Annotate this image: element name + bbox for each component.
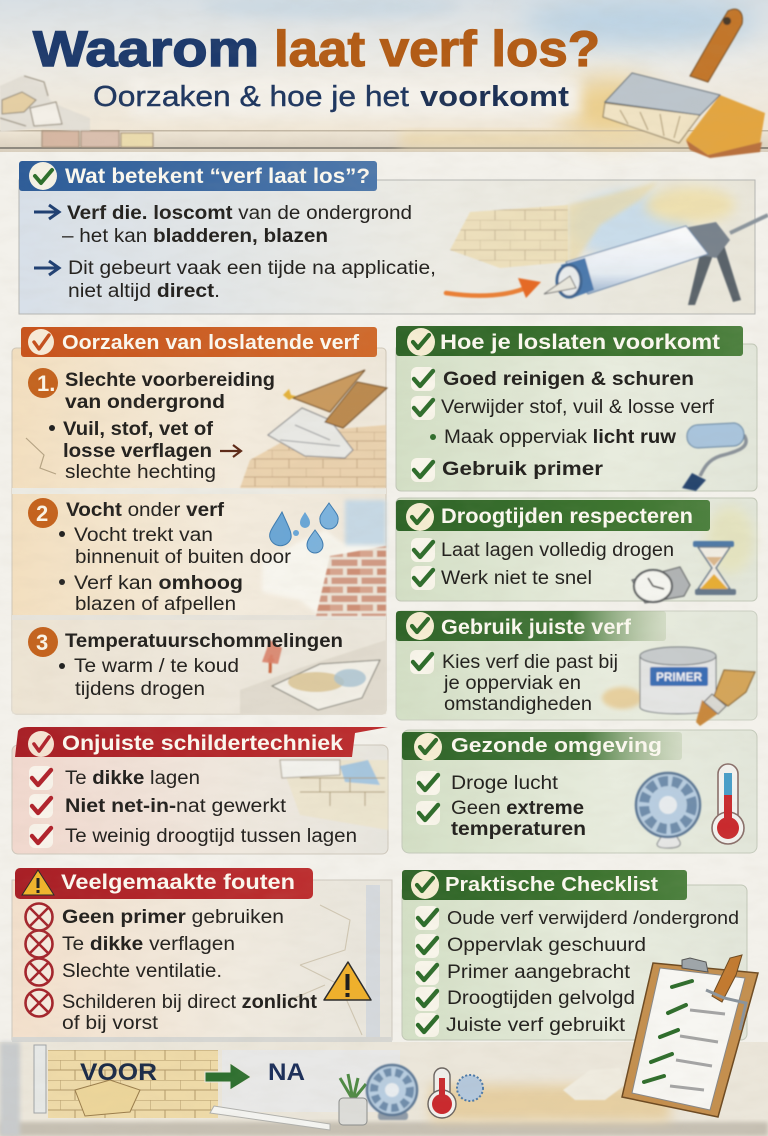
illustration: cracked wall: [280, 760, 388, 830]
text block: Verf die. loscomt van de ondergrond: [67, 203, 412, 224]
heading bar: Hoe je loslaten voorkomt: [440, 331, 720, 354]
icon: caulking gun with orange arrow: [446, 215, 768, 305]
icon: small fan: [367, 1065, 417, 1120]
title: Waarom: [33, 21, 259, 77]
heading bar: [19, 161, 377, 191]
item: [29, 766, 200, 790]
item: [416, 771, 559, 795]
badge 1: 1.: [37, 371, 55, 396]
cause 2 detail: Verf kan omhoog: [74, 573, 243, 594]
subtitle: Oorzaken & hoe je het: [93, 81, 409, 113]
before wall: [48, 1050, 218, 1118]
item: Droge lucht: [451, 773, 559, 794]
heading bar: Gebruik juiste verf: [441, 616, 632, 639]
heading bar: [15, 727, 388, 757]
cause 2 detail: binnenuit of buiten door: [75, 547, 292, 568]
panel: gebruik juiste verf: [396, 611, 757, 726]
item: Goed reinigen & schuren: [443, 369, 694, 390]
cause 3 detail: Te warm / te koud: [74, 656, 239, 677]
item: [416, 798, 586, 840]
panel: praktische checklist: [402, 870, 747, 1040]
cracked wall: [0, 76, 153, 147]
heading bar: Wat betekent “verf laat los”?: [65, 165, 370, 188]
cause 1 detail: Vuil, stof, vet of: [63, 419, 214, 440]
item: Werk niet te snel: [441, 568, 592, 589]
cause 1 title: Slechte voorbereiding: [65, 370, 275, 391]
item: Gebruik primer: [442, 459, 604, 480]
item: Oppervlak geschuurd: [447, 935, 646, 956]
item: [415, 987, 635, 1011]
cause 2 title: Vocht onder verf: [66, 500, 225, 521]
panel: droogtijden: [396, 498, 757, 603]
item: [411, 566, 592, 590]
illustration: brick wall corner: [450, 182, 735, 268]
icon: primer paint can with brush: [602, 647, 755, 726]
crack: [26, 438, 56, 474]
item: Schilderen bij direct zonlicht: [62, 992, 318, 1013]
text block: niet altijd direct .: [68, 281, 220, 302]
heading bar: [396, 500, 710, 531]
rock: [563, 1068, 625, 1100]
illustration: cracked cloth and heat: [240, 640, 386, 714]
item: Geen primer gebruiken: [62, 907, 284, 928]
icon: fan: [636, 773, 700, 848]
bottom scene: [0, 955, 768, 1136]
subtitle: [93, 81, 569, 113]
item: Juiste verf gebruikt: [446, 1015, 626, 1036]
item: [415, 1013, 626, 1037]
title: [33, 21, 600, 77]
arrow bullet: [34, 261, 59, 275]
item: temperaturen: [451, 819, 586, 840]
icon: primer paint can with brush: PRIMER: [656, 670, 702, 684]
illustration: sandpaper and cloth on brick: [240, 370, 387, 488]
item: [415, 934, 646, 958]
icon: clipboard with checklist: [622, 955, 758, 1117]
cause 1 title: van ondergrond: [65, 392, 225, 413]
panel: veelgemaakte fouten: [12, 868, 392, 1042]
badge 1: [28, 368, 58, 398]
text block: Dit gebeurt vaak een tijde na applicatie,: [68, 258, 436, 279]
heading bar: Onjuiste schildertechniek: [62, 732, 343, 755]
cause 3 title: Temperatuurschommelingen: [65, 631, 343, 652]
text block: [68, 258, 436, 302]
cause 1 detail: losse verflagen: [63, 441, 212, 462]
item: Primer aangebracht: [447, 962, 631, 983]
cause 2 detail: Vocht trekt van: [74, 525, 213, 546]
item: [26, 904, 284, 930]
illustration: wet wall with droplets: [262, 500, 386, 616]
text block: – het kan bladderen, blazen: [62, 226, 328, 247]
cause 2 detail: [59, 525, 292, 615]
heading bar: [402, 870, 687, 900]
item: Verwijder stof, vuil & losse verf: [441, 397, 715, 418]
item: Niet net-in- nat gewerkt: [65, 796, 287, 817]
heading bar: [15, 868, 313, 899]
icon: small thermometer: [428, 1068, 456, 1118]
item: [26, 990, 318, 1034]
subtitle: voorkomt: [420, 81, 569, 113]
header banner: [0, 0, 768, 158]
cause 1 detail: slechte hechting: [65, 462, 216, 483]
cause 3 detail: tijdens drogen: [75, 679, 205, 700]
item: of bij vorst: [62, 1013, 159, 1034]
label: VOOR: [80, 1059, 157, 1086]
text block: [62, 203, 412, 247]
after wall: [210, 1050, 400, 1130]
icon: paint brush on sanding block: [603, 9, 765, 158]
cause 1 title: [65, 370, 275, 413]
item: Te weinig droogtijd tussen lagen: [65, 826, 357, 847]
panel: oorzaken: [12, 327, 387, 714]
panel: onjuiste schildertechniek: [12, 727, 388, 854]
heading bar: Praktische Checklist: [445, 874, 658, 896]
item: Slechte ventilatie.: [62, 961, 222, 982]
panel: wat betekent verf laat los: [19, 161, 768, 314]
heading bar: [21, 327, 377, 357]
heading bar: Oorzaken van loslatende verf: [62, 332, 359, 354]
heading bar: Droogtijden respecteren: [441, 505, 693, 528]
heading bar: [402, 732, 682, 761]
title: laat verf los?: [274, 21, 600, 77]
item: [410, 650, 618, 715]
item: [411, 458, 604, 482]
icon: warning triangle: [324, 962, 371, 1000]
icon: snow: [457, 1075, 483, 1101]
icon: clock: [632, 567, 690, 603]
heading bar: Gezonde omgeving: [451, 735, 662, 757]
item: Kies verf die past bij: [442, 652, 618, 673]
badge 2: 2: [36, 501, 48, 526]
icon: plant: [339, 1074, 367, 1125]
cause 2 detail: blazen of afpellen: [75, 594, 236, 615]
arrow bullet: [34, 205, 59, 219]
item: [411, 367, 694, 391]
panel: gezonde omgeving: [402, 730, 757, 853]
item: Droogtijden gelvolgd: [447, 988, 635, 1009]
item: Geen extreme: [451, 798, 584, 819]
icon: hourglass: [693, 541, 736, 595]
item: [415, 961, 631, 985]
item: Oude verf verwijderd /ondergrond: [447, 907, 739, 928]
item: [26, 958, 222, 986]
icon: thermometer: [712, 764, 744, 844]
arrow: before to after: [205, 1063, 251, 1090]
item: omstandigheden: [444, 694, 592, 715]
item: Te dikke lagen: [65, 768, 200, 789]
label: NA: [268, 1059, 305, 1086]
item: Laat lagen volledig drogen: [441, 540, 674, 561]
item: Maak opperviak licht ruw: [444, 427, 676, 448]
icon: paint roller: [682, 422, 746, 491]
badge 3: 3: [36, 630, 48, 655]
heading bar: [396, 326, 743, 356]
cause 3 detail: [59, 656, 239, 700]
item: Te dikke verflagen: [62, 934, 235, 955]
badge 2: [28, 498, 58, 528]
heading bar: [396, 611, 666, 641]
arrow: [220, 445, 241, 457]
heading bar: Veelgemaakte fouten: [61, 871, 295, 894]
item: [26, 930, 235, 958]
item: je opperviak en: [443, 673, 581, 694]
cause 1 detail: [49, 419, 216, 483]
badge 3: [28, 627, 58, 657]
panel: hoe je loslaten voorkomt: [396, 326, 757, 491]
